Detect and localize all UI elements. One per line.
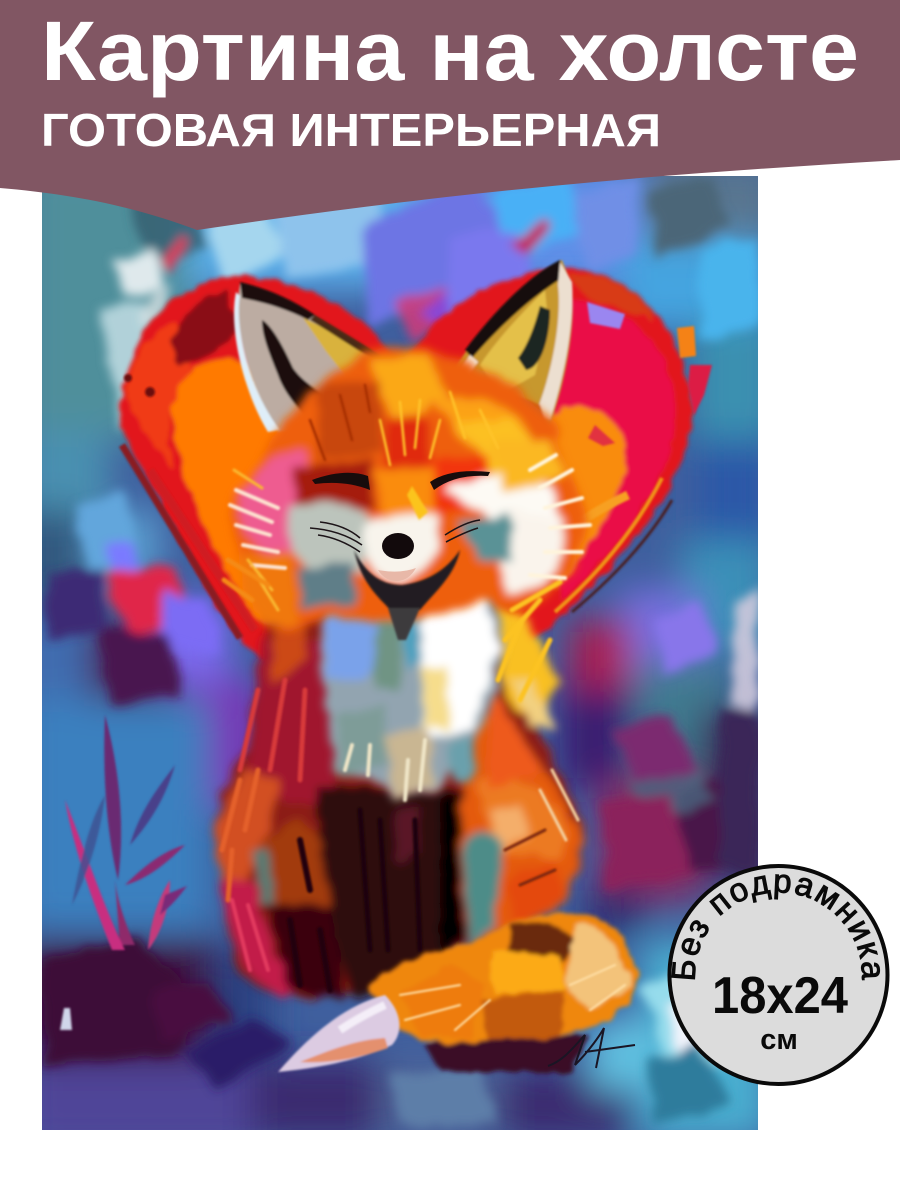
badge: curved label: Без подрамника: [672, 874, 880, 980]
fox: body: [215, 600, 585, 1000]
fox: nose: [382, 533, 414, 559]
fox: chest white fur: [321, 570, 502, 800]
fox: left leg: [262, 818, 336, 915]
header banner: [0, 0, 900, 230]
badge: size value: 18x24: [712, 967, 848, 1025]
fox: whiskers: [310, 520, 480, 552]
fox: left cheek pink: [239, 449, 312, 560]
fox: tail side crimson: [222, 880, 300, 1000]
fox: dark belly: [315, 785, 465, 1000]
heart: right orange sweep: [550, 401, 631, 591]
fox: right side flame: [460, 700, 585, 945]
fox: closed eyes: [312, 473, 370, 490]
fox: eye shadow red: [292, 460, 375, 515]
heart: shape: [116, 264, 697, 661]
fox: nose bridge highlight: [407, 486, 428, 520]
fox: head: [232, 349, 586, 640]
fox: tail: [278, 913, 636, 1072]
signature: [548, 1028, 635, 1068]
painting background: brush strokes: [45, 175, 760, 1125]
heart: details: [122, 302, 712, 638]
fox: head top yellow: [370, 355, 445, 420]
fox: right cheek white: [445, 474, 565, 525]
fox: left ear: [234, 282, 392, 432]
fox: mouth: [378, 568, 416, 581]
badge: unit: см: [760, 1024, 798, 1056]
fox: left cheek gray-white: [287, 502, 370, 580]
fox: left shoulder crimson: [240, 640, 335, 810]
fox: right ear: [458, 258, 574, 422]
fox: left haunch orange-red: [216, 770, 280, 910]
fox: right shoulder yellow: [495, 600, 560, 720]
fox: dark muzzle shadow: [354, 550, 460, 640]
subtitle: ГОТОВАЯ ИНТЕРЬЕРНАЯ: [41, 104, 661, 156]
fox: right eye red: [423, 455, 493, 515]
title: Картина на холсте: [41, 4, 859, 98]
size badge: [624, 864, 890, 1086]
painting: fox and heart on canvas: [20, 160, 780, 1150]
fox: tail white tip: [278, 995, 399, 1072]
heart: right pink fill: [553, 298, 678, 601]
painting background: blurred colour fields: [20, 160, 780, 1150]
fox: snout: [375, 468, 436, 525]
painting background: grass blades: [60, 715, 187, 1030]
heart: left orange fill: [171, 360, 300, 625]
fox: fur strokes: [222, 385, 590, 990]
